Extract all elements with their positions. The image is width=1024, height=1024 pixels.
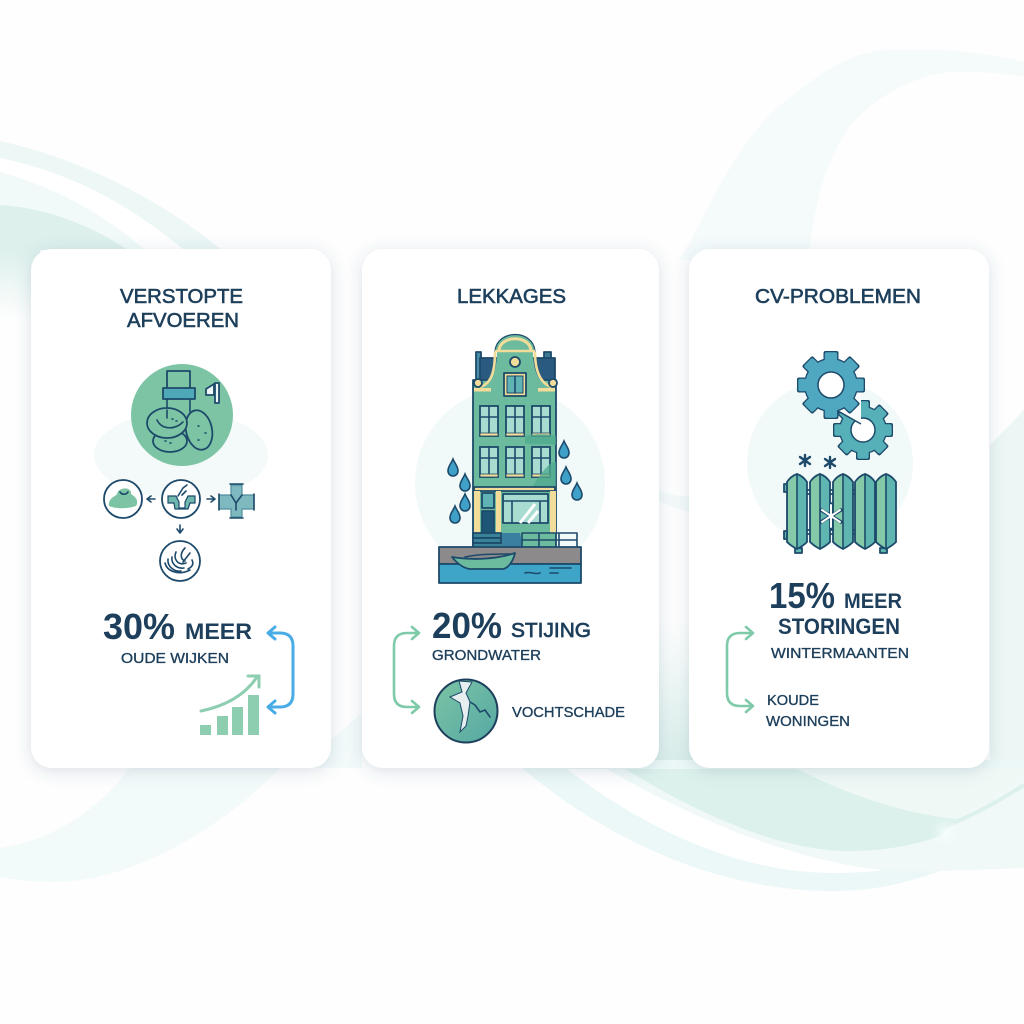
label: oude wijken: OUDE WIJKEN: [121, 650, 229, 667]
icon: swirl: [160, 541, 200, 581]
heading: verstopte afvoeren: AFVOEREN: [127, 310, 239, 332]
panel: cv-problemen: [689, 249, 989, 768]
heading: cv-problemen: CV-PROBLEMEN: [755, 286, 921, 308]
stat: 15% meer: 15%: [769, 575, 835, 616]
stat: 20% stijging: STIJING: [511, 620, 591, 642]
panel: lekkages: [362, 249, 659, 768]
icon: radiator: [784, 474, 896, 553]
arrow: green bracket: [394, 627, 419, 713]
label: koude woningen: WONINGEN: [766, 713, 850, 730]
icon: clogged pipe: [131, 364, 233, 466]
label: storingen: STORINGEN: [778, 614, 900, 639]
label: wintermaanten: WINTERMAANTEN: [771, 645, 909, 662]
heading: verstopte afvoeren: [120, 286, 243, 332]
stat: 20% stijging: [432, 605, 591, 646]
stat: 30% meer: [103, 606, 252, 647]
backdrop blob: [94, 411, 268, 499]
arrow: double blue: [268, 627, 293, 713]
icon: water drops: [448, 441, 582, 523]
icon: gears: [797, 351, 893, 460]
icon: snow asterisks: [800, 455, 835, 468]
label: koude woningen: [766, 692, 850, 730]
panel: verstopte afvoeren: [31, 249, 331, 768]
label: vochtschade: VOCHTSCHADE: [512, 704, 625, 721]
icon: pipe junction: [219, 484, 254, 518]
icon: sludge: [104, 480, 142, 518]
icon: cracked wall: [434, 680, 498, 742]
backdrop circle: [415, 388, 605, 578]
arrow: down: [177, 525, 183, 533]
stat: 15% meer: [769, 575, 902, 616]
heading: verstopte afvoeren: VERSTOPTE: [120, 286, 243, 308]
arrow: left: [147, 496, 155, 502]
heading: lekkages: LEKKAGES: [457, 286, 566, 308]
arrow: green bracket: [727, 627, 753, 712]
stat: 15% meer: MEER: [844, 590, 902, 613]
label: grondwater: GRONDWATER: [432, 647, 541, 664]
backdrop circle: [747, 380, 913, 546]
stat: 30% meer: MEER: [185, 619, 252, 644]
icon: canal house: [439, 334, 581, 583]
icon: broken pipe: [162, 480, 200, 518]
stat: 30% meer: 30%: [103, 606, 175, 647]
stat: 20% stijging: 20%: [432, 605, 502, 646]
label: koude woningen: KOUDE: [767, 692, 819, 709]
arrow: right: [207, 496, 215, 502]
chart: rising bars: [200, 676, 259, 735]
